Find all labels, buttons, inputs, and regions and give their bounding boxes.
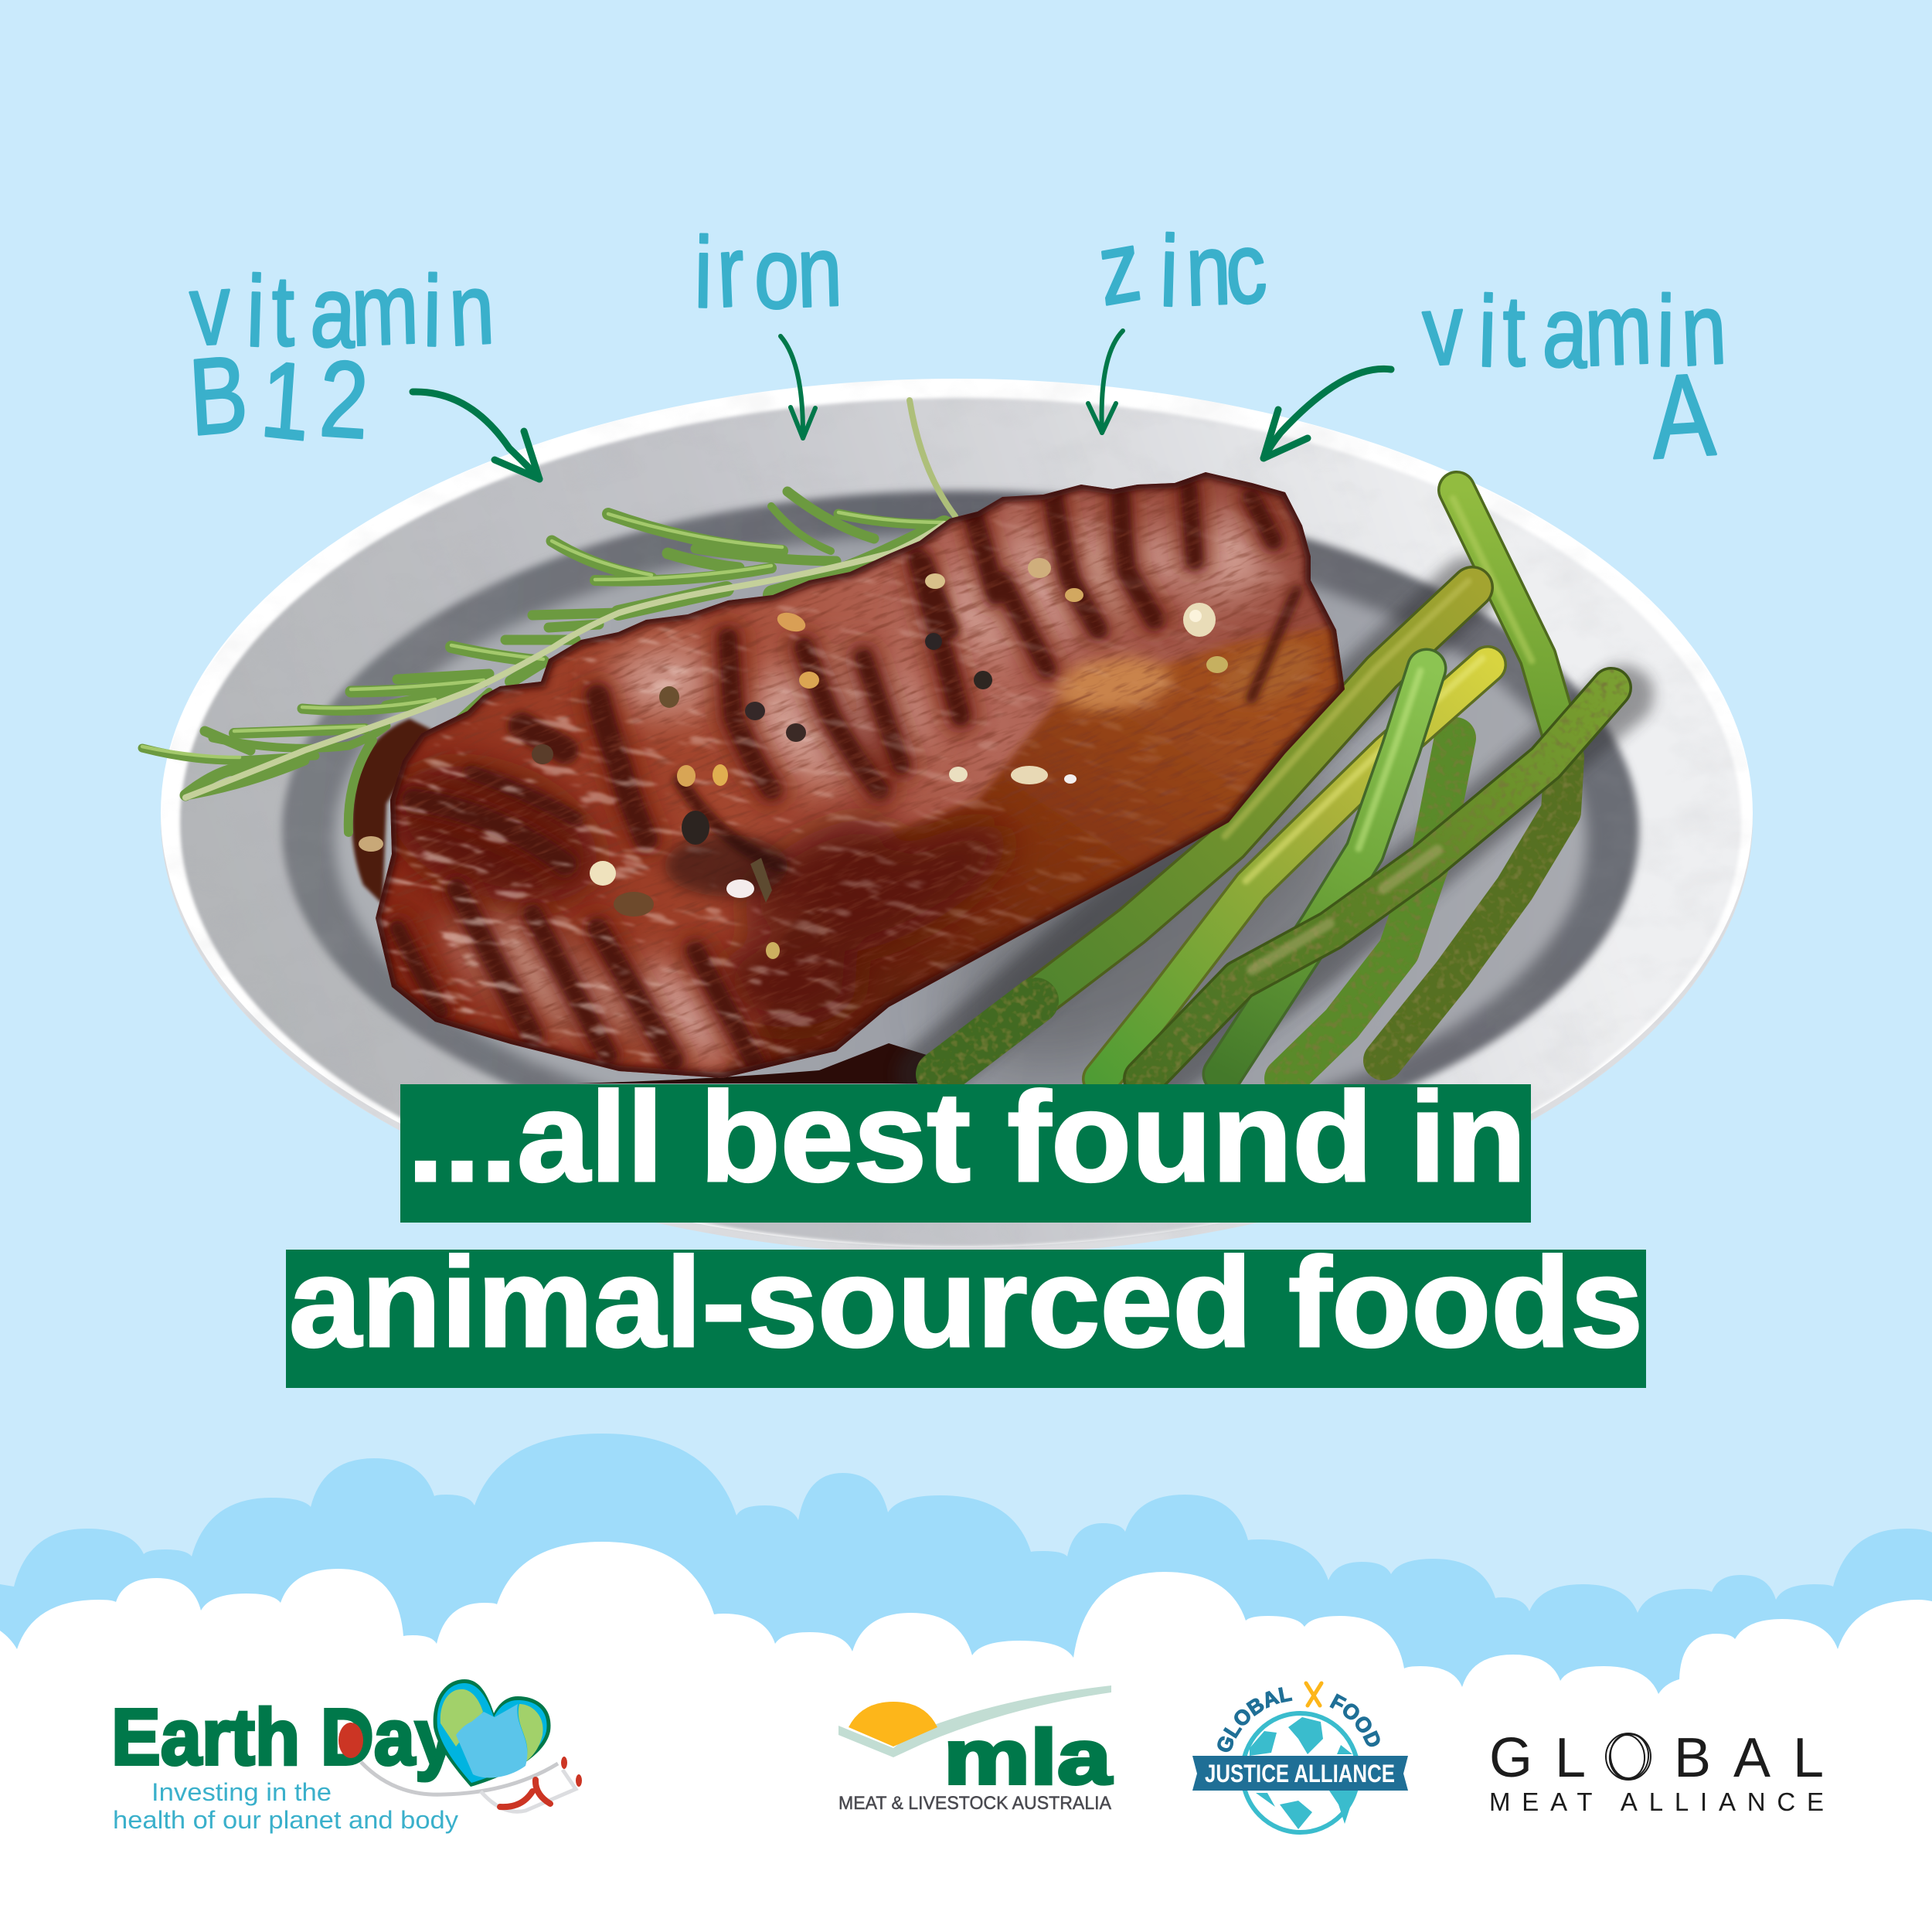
mla wordmark: mla	[944, 1714, 1113, 1801]
spear bright centre	[1223, 668, 1427, 1074]
peppercorns and salt	[359, 558, 1228, 959]
asparagus	[927, 490, 1623, 1079]
vitamin B12 handwritten label: B12	[186, 332, 371, 463]
plate	[161, 379, 1754, 1255]
logo: Global Food Justice Alliance	[1192, 1682, 1408, 1835]
stethoscope tube	[361, 1762, 558, 1794]
steak edge shading	[376, 472, 1345, 1078]
wordmark: Earth Day	[111, 1692, 456, 1781]
spear top long	[939, 581, 1472, 1074]
mla caption: MEAT & LIVESTOCK AUSTRALIA	[838, 1793, 1111, 1814]
vitamin B12 handwritten label	[186, 251, 496, 463]
ring O	[1606, 1732, 1651, 1781]
logo: Earth Day: health of our planet and body	[113, 1806, 458, 1834]
grill marks underglaze	[397, 487, 1274, 1066]
swoosh	[838, 1685, 1111, 1757]
glossy highlights	[376, 497, 1316, 1078]
arrow: iron	[781, 336, 815, 438]
spear yellow	[1101, 658, 1488, 1079]
vitamin B12 handwritten label: vitamin	[188, 251, 496, 369]
rosemary leaves	[142, 400, 955, 832]
logo: MLA	[838, 1685, 1113, 1814]
grill marks core	[397, 487, 1297, 1066]
spear behind centre	[1285, 738, 1455, 1079]
front white cloud layer	[0, 1542, 1932, 1932]
zinc handwritten label: zinc	[1094, 208, 1270, 328]
rosemary leaf highlights	[142, 512, 944, 757]
banner text: JUSTICE ALLIANCE	[1205, 1760, 1395, 1787]
vitamin A handwritten label: A	[1649, 349, 1718, 484]
headline line 1: ...all best found in	[407, 1066, 1526, 1208]
fork and knife	[1306, 1683, 1321, 1706]
vitamin A handwritten label	[1420, 271, 1729, 484]
spear front long	[1144, 688, 1611, 1079]
heart globe	[434, 1679, 550, 1787]
seasoning cluster	[665, 835, 788, 896]
stethoscope red ends	[500, 1780, 550, 1807]
curved FOOD: FOOD	[1329, 1693, 1380, 1747]
spear long right	[1383, 490, 1564, 1060]
meat grain texture	[388, 481, 1338, 1070]
steak side crust	[711, 626, 1360, 1090]
arrow: vitamin B12	[413, 392, 539, 479]
tagline: Investing in the	[151, 1778, 332, 1806]
vitamin A handwritten label: vitamin	[1420, 271, 1729, 389]
iron handwritten label: iron	[694, 213, 843, 330]
rosemary main stem	[185, 524, 944, 798]
globe	[1243, 1713, 1359, 1832]
pink meat patches	[434, 501, 1275, 1080]
logo: Earth Day	[111, 1679, 582, 1834]
curved GLOBAL: GLOBAL	[1217, 1687, 1292, 1753]
lit fat patch	[1053, 651, 1173, 716]
asparagus shadow	[927, 587, 1623, 1074]
arrow: vitamin A	[1264, 369, 1391, 458]
logo: Global Meat Alliance: MEAT ALLIANCE	[1489, 1787, 1824, 1816]
headline line 2: animal-sourced foods	[289, 1231, 1643, 1373]
steak	[376, 472, 1345, 1078]
banner	[1192, 1756, 1408, 1791]
logo: Global Meat Alliance	[1489, 1727, 1824, 1816]
dark glaze area	[372, 740, 1025, 1028]
stethoscope bead	[338, 1723, 363, 1758]
rosemary sprig	[142, 400, 955, 832]
logo: Global Meat Alliance: GLOBAL	[1489, 1727, 1824, 1789]
arrow: zinc	[1088, 331, 1123, 433]
sun	[849, 1702, 937, 1747]
back cloud layer	[0, 1434, 1932, 1777]
